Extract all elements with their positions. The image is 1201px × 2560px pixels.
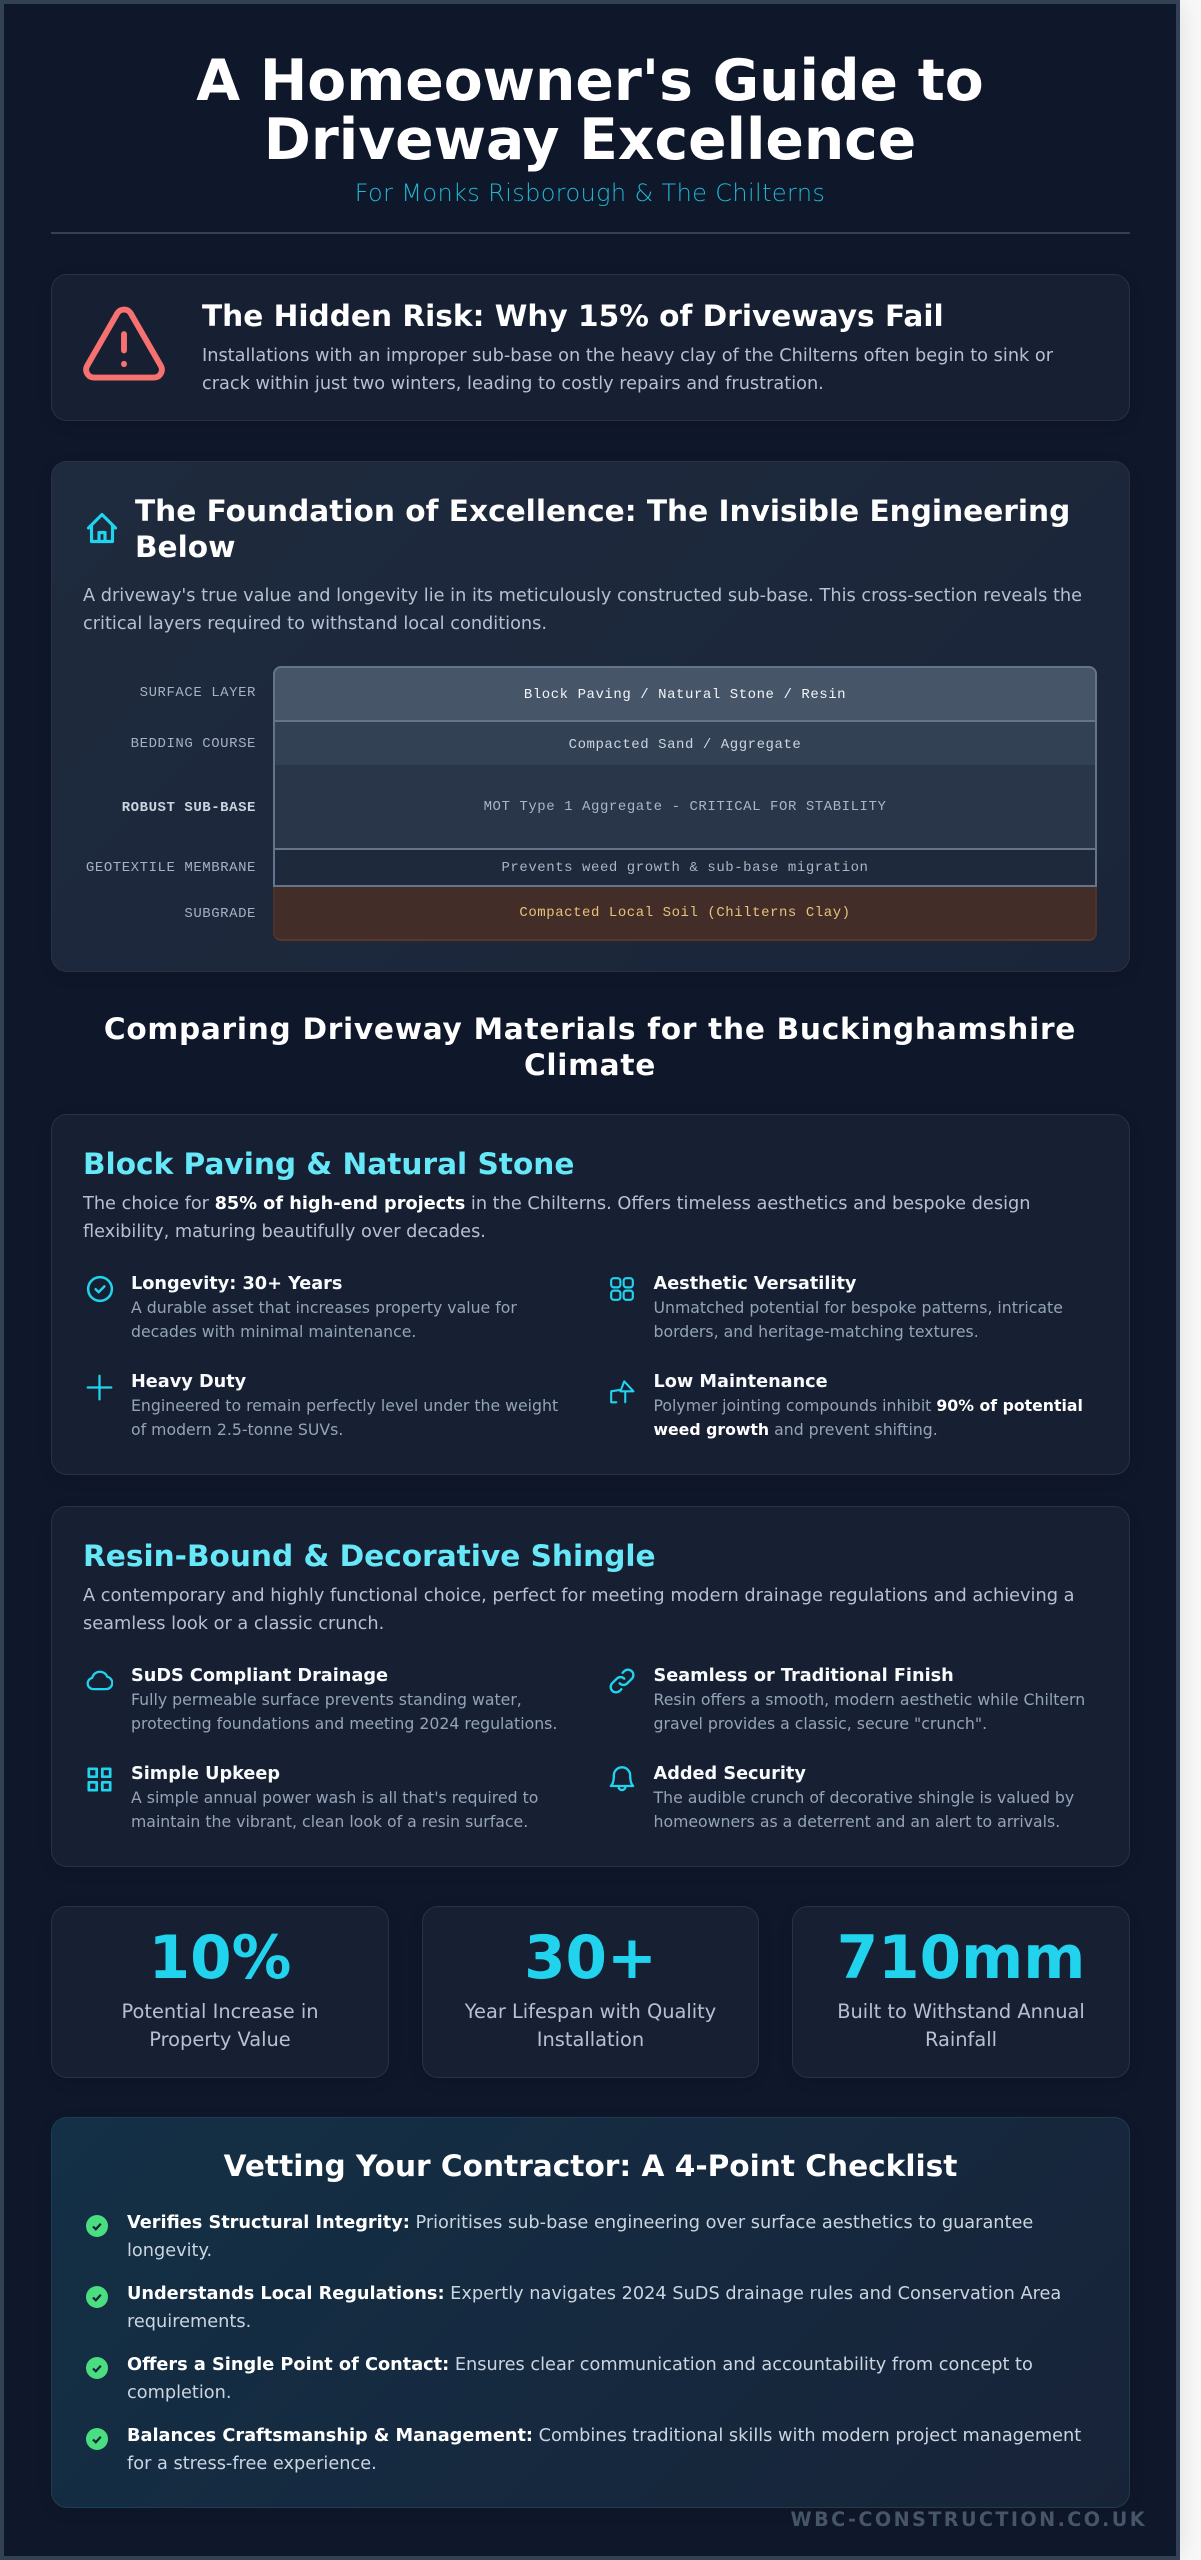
- panel: contractor checklist: [51, 2117, 1130, 2508]
- check 1: Verifies Structural Integrity: Prioritises sub-base engineering over surface aesthetics to guarantee: [127, 2213, 1033, 2233]
- stat: property value: 10%: [149, 1924, 291, 1993]
- subtitle: For Monks Risborough & The Chilterns: [355, 179, 825, 207]
- stat: lifespan: Year Lifespan with Quality: [465, 2000, 716, 2023]
- description: flexibility, maturing beautifully over decades.: [83, 1222, 486, 1242]
- heading: Vetting Your Contractor: A 4-Point Checklist: [224, 2149, 957, 2183]
- stat: property value: Potential Increase in: [121, 2000, 318, 2023]
- section heading: comparing materials: Climate: [524, 1048, 656, 1082]
- feature: aesthetic versatility: Unmatched potential for bespoke patterns, intricate: [654, 1298, 1063, 1317]
- check 3: [86, 2355, 1033, 2403]
- icon: warning triangle: [83, 306, 165, 380]
- check 2: Understands Local Regulations: Expertly navigates 2024 SuDS drainage rules and Conservation Area: [127, 2284, 1061, 2304]
- heading: The Hidden Risk: Why 15% of Driveways Fail: [202, 299, 944, 333]
- feature: aesthetic versatility: [654, 1274, 1063, 1341]
- cross-section diagram: [273, 666, 1097, 941]
- check 3: completion.: [127, 2383, 232, 2403]
- feature: seamless finish: gravel provides a classic, secure "crunch".: [654, 1714, 987, 1733]
- stat: property value: [51, 1906, 389, 2078]
- check 2: [86, 2284, 1061, 2332]
- description: Installations with an improper sub-base on the heavy clay of the Chilterns often begin to sink or: [202, 346, 1053, 366]
- feature: simple upkeep: maintain the vibrant, clean look of a resin surface.: [131, 1812, 528, 1831]
- icon: cloud: [86, 1670, 113, 1690]
- feature: suds drainage: Fully permeable surface prevents standing water,: [131, 1690, 522, 1709]
- feature: low maintenance: weed growth and prevent shifting.: [654, 1420, 938, 1439]
- description: A contemporary and highly functional choice, perfect for meeting modern drainage regulations and achieving a: [83, 1586, 1074, 1606]
- icon: rounded grid: [610, 1277, 634, 1301]
- surface layer: [273, 666, 1097, 722]
- feature: heavy duty: Engineered to remain perfectly level under the weight: [131, 1396, 558, 1415]
- section heading: comparing materials: [104, 1012, 1076, 1082]
- layer labels: BEDDING COURSE: [131, 736, 256, 752]
- feature: suds drainage: SuDS Compliant Drainage: [131, 1666, 388, 1686]
- header divider: [51, 232, 1130, 234]
- description: crack within just two winters, leading to costly repairs and frustration.: [202, 374, 824, 394]
- stat: rainfall: Rainfall: [925, 2028, 997, 2051]
- feature: aesthetic versatility: borders, and heritage-matching textures.: [654, 1322, 979, 1341]
- icon: link: [610, 1668, 634, 1694]
- feature: simple upkeep: Simple Upkeep: [131, 1764, 280, 1784]
- layer labels: GEOTEXTILE MEMBRANE: [86, 860, 256, 876]
- feature: low maintenance: Low Maintenance: [654, 1372, 828, 1392]
- bedding course: [273, 722, 1097, 765]
- subgrade: Compacted Local Soil (Chilterns Clay): [519, 905, 851, 921]
- description: [83, 1586, 1074, 1634]
- bedding course: Compacted Sand / Aggregate: [569, 737, 801, 753]
- description: The choice for 85% of high-end projects in the Chilterns. Offers timeless aesthetics and bespoke design: [83, 1194, 1030, 1214]
- layer labels: [86, 685, 256, 922]
- panel: foundation cross-section: [51, 461, 1130, 972]
- feature: seamless finish: Resin offers a smooth, modern aesthetic while Chiltern: [654, 1690, 1085, 1709]
- title: A Homeowner's Guide to: [196, 48, 984, 114]
- stat: property value: Property Value: [149, 2028, 291, 2051]
- description: [83, 586, 1082, 634]
- icon: square grid: [87, 1768, 112, 1792]
- stat: lifespan: 30+: [524, 1924, 657, 1993]
- feature: suds drainage: [131, 1666, 557, 1733]
- sub-base: [273, 765, 1097, 850]
- check 1: [86, 2213, 1033, 2261]
- check 4: for a stress-free experience.: [127, 2454, 377, 2474]
- layer labels: SURFACE LAYER: [140, 685, 256, 701]
- stat: rainfall: [792, 1906, 1130, 2078]
- feature: heavy duty: Heavy Duty: [131, 1372, 246, 1392]
- feature: heavy duty: of modern 2.5-tonne SUVs.: [131, 1420, 343, 1439]
- description: [82, 1194, 1030, 1242]
- watermark: WBC-CONSTRUCTION.CO.UK: [791, 2508, 1147, 2531]
- feature: seamless finish: Seamless or Traditional Finish: [654, 1666, 954, 1686]
- description: seamless look or a classic crunch.: [83, 1614, 384, 1634]
- panel: hidden risk: [51, 274, 1130, 421]
- check 1: longevity.: [127, 2241, 212, 2261]
- heading: Below: [135, 530, 235, 564]
- icon: low maintenance: [610, 1380, 634, 1404]
- geotextile membrane: [273, 850, 1097, 887]
- description: A driveway's true value and longevity lie in its meticulously constructed sub-base. This cross-section reveals the: [83, 586, 1082, 606]
- check 2: requirements.: [127, 2312, 251, 2332]
- feature: simple upkeep: [131, 1764, 538, 1831]
- layer labels: ROBUST SUB-BASE: [122, 800, 256, 816]
- check 3: Offers a Single Point of Contact: Ensures clear communication and accountability from concept to: [127, 2355, 1033, 2375]
- feature: low maintenance: [654, 1372, 1083, 1439]
- feature: heavy duty: [131, 1372, 558, 1439]
- title: Driveway Excellence: [264, 107, 916, 173]
- feature: low maintenance: Polymer jointing compounds inhibit 90% of potential: [654, 1396, 1083, 1415]
- feature: seamless finish: [654, 1666, 1085, 1733]
- geotextile membrane: Prevents weed growth & sub-base migration: [501, 860, 868, 876]
- heading: [135, 494, 1070, 564]
- icon: plus: [86, 1374, 112, 1400]
- icon: house: [86, 512, 118, 544]
- description: critical layers required to withstand local conditions.: [83, 614, 547, 634]
- surface layer: Block Paving / Natural Stone / Resin: [524, 687, 846, 703]
- heading: Resin-Bound & Decorative Shingle: [83, 1539, 656, 1573]
- check 4: Balances Craftsmanship & Management: Combines traditional skills with modern project management: [127, 2426, 1081, 2446]
- stat: rainfall: 710mm: [837, 1924, 1085, 1993]
- section heading: comparing materials: Comparing Driveway Materials for the Buckinghamshire: [104, 1012, 1076, 1046]
- feature: longevity: Longevity: 30+ Years: [131, 1274, 342, 1294]
- feature: suds drainage: protecting foundations and meeting 2024 regulations.: [131, 1714, 557, 1733]
- stat: lifespan: Installation: [537, 2028, 644, 2051]
- check 4: [86, 2426, 1081, 2474]
- panel: resin and shingle: [51, 1506, 1130, 1867]
- feature: aesthetic versatility: Aesthetic Versatility: [654, 1274, 856, 1294]
- sub-base: MOT Type 1 Aggregate - CRITICAL FOR STABILITY: [484, 799, 886, 815]
- icon: bell: [610, 1766, 634, 1792]
- subgrade: [273, 887, 1097, 941]
- feature: longevity: A durable asset that increases property value for: [131, 1298, 517, 1317]
- feature: longevity: [131, 1274, 517, 1341]
- feature: added security: homeowners as a deterrent and an alert to arrivals.: [654, 1812, 1060, 1831]
- feature: added security: The audible crunch of decorative shingle is valued by: [654, 1788, 1074, 1807]
- panel: block paving: [51, 1114, 1130, 1475]
- heading: The Foundation of Excellence: The Invisible Engineering: [135, 494, 1070, 528]
- feature: added security: [653, 1764, 1074, 1831]
- feature: simple upkeep: A simple annual power wash is all that's required to: [131, 1788, 538, 1807]
- title: [196, 48, 984, 173]
- feature: longevity: decades with minimal maintenance.: [131, 1322, 416, 1341]
- icon: check circle: [86, 1276, 114, 1302]
- heading: Block Paving & Natural Stone: [83, 1147, 574, 1181]
- stat: lifespan: [422, 1906, 759, 2078]
- description: [202, 346, 1054, 394]
- feature: added security: Added Security: [654, 1764, 806, 1784]
- stat: rainfall: Built to Withstand Annual: [837, 2000, 1085, 2023]
- layer labels: SUBGRADE: [184, 906, 256, 922]
